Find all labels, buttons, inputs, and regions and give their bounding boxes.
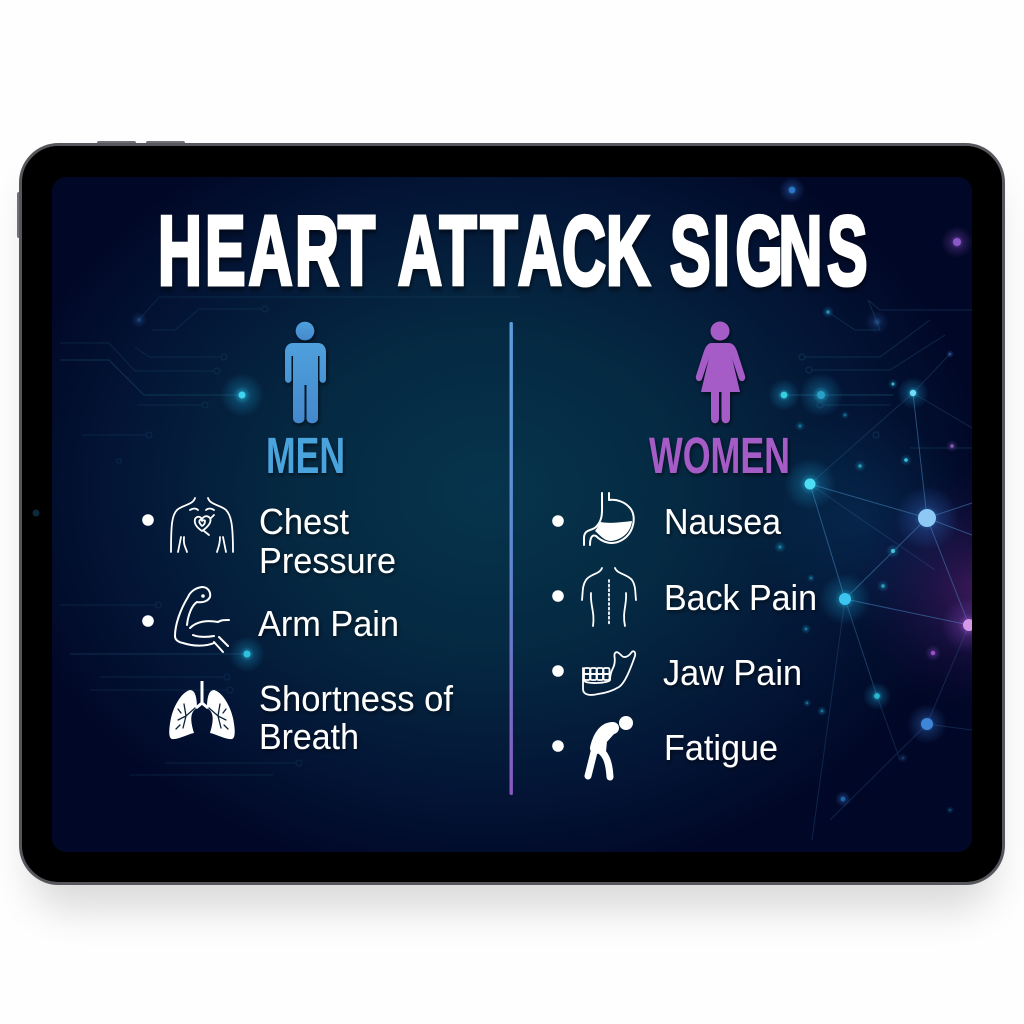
fatigue label: Fatigue (664, 727, 778, 768)
item: nausea (552, 493, 782, 545)
glow nodes (131, 177, 997, 814)
icon: flexed arm (175, 587, 229, 652)
icon: bent-over figure (588, 716, 633, 777)
icon: chest (171, 498, 233, 552)
icon: back (582, 568, 636, 626)
item: arm pain (142, 587, 399, 652)
nausea label: Nausea (664, 501, 782, 542)
item: jaw pain (552, 651, 802, 695)
icon: stomach (584, 493, 634, 545)
device shadow (30, 175, 995, 910)
icon: lungs (169, 681, 235, 739)
chest pressure label: Pressure (259, 540, 396, 581)
men heading: MEN (266, 427, 345, 484)
circuit lines left (60, 297, 520, 775)
icon: man figure (285, 322, 326, 423)
item: fatigue (552, 716, 778, 777)
icon: jaw (583, 651, 635, 695)
item: chest pressure (142, 498, 396, 581)
shortness of breath label: Shortness of (259, 678, 454, 719)
tablet device (17, 141, 1004, 884)
women column (552, 322, 817, 777)
front camera (32, 510, 40, 516)
circuit lines right (784, 300, 972, 448)
women heading: WOMEN (649, 427, 790, 484)
title: HEART ATTACK SIGNS (158, 197, 868, 306)
network lines (810, 393, 972, 696)
men column (142, 322, 454, 757)
divider (510, 322, 513, 795)
icon: woman figure (696, 322, 745, 423)
shortness of breath label: Breath (259, 716, 359, 757)
jaw pain label: Jaw Pain (663, 652, 802, 693)
tablet bezel (20, 144, 1004, 884)
screen (52, 177, 997, 852)
arm pain label: Arm Pain (258, 603, 399, 644)
top hardware buttons (17, 141, 185, 238)
item: back pain (552, 568, 817, 626)
back pain label: Back Pain (664, 577, 817, 618)
screen background (52, 177, 972, 852)
item: shortness of breath (169, 681, 454, 752)
chest pressure label: Chest (259, 501, 349, 542)
